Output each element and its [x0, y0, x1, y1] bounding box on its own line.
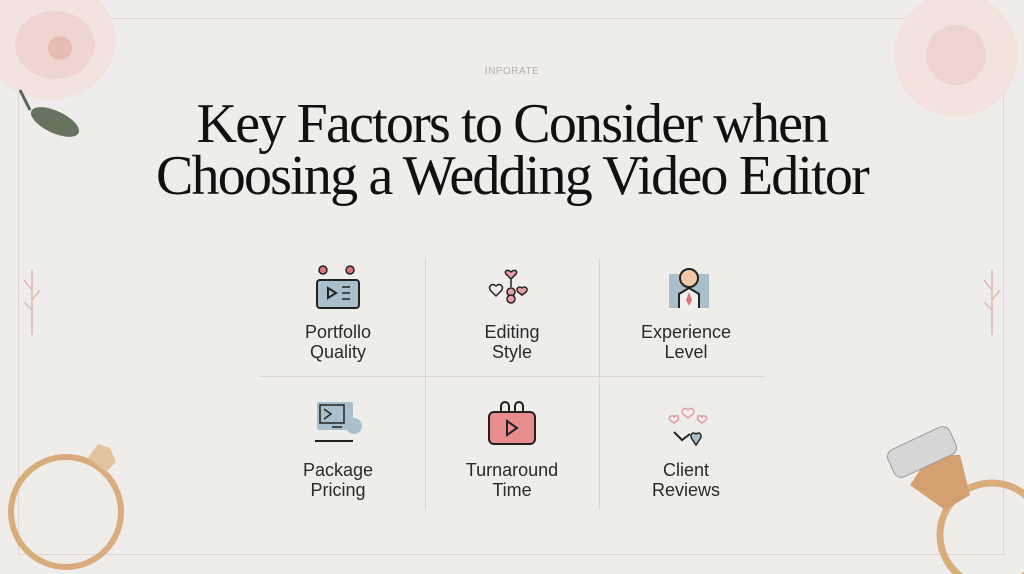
flower top right	[894, 0, 1018, 117]
icon: portfolio	[316, 265, 360, 309]
label: portfolio: Portfollo	[305, 322, 371, 342]
sprig right	[984, 270, 1000, 335]
label: package: Package	[303, 460, 373, 480]
label: experience	[641, 322, 731, 362]
label: portfolio	[305, 322, 371, 362]
subtitle: INPORATE	[485, 66, 539, 77]
icon: experience	[669, 268, 709, 308]
sprig left	[24, 270, 40, 335]
title: Choosing a Wedding Video Editor	[156, 145, 868, 207]
label: editing	[484, 322, 540, 362]
title: Key Factors to Consider when	[197, 93, 827, 155]
label: package: Pricing	[310, 480, 366, 500]
label: turnaround: Time	[492, 480, 532, 500]
ring left	[8, 444, 124, 570]
label: turnaround	[466, 460, 558, 500]
title	[156, 93, 870, 207]
flower top left	[0, 0, 116, 137]
label: package	[303, 460, 373, 500]
ring right	[887, 426, 1024, 574]
icon: editing style	[488, 270, 528, 304]
label: experience: Experience	[641, 322, 731, 342]
label: editing: Style	[492, 342, 532, 362]
label: reviews	[652, 460, 720, 500]
label: experience: Level	[664, 342, 708, 362]
label: reviews: Client	[663, 460, 709, 480]
label: turnaround: Turnaround	[466, 460, 558, 480]
label: reviews: Reviews	[652, 480, 720, 500]
label: portfolio: Quality	[310, 342, 366, 362]
icon: reviews	[668, 408, 708, 446]
icon: package	[315, 402, 362, 442]
label: editing: Editing	[484, 322, 540, 342]
icon: turnaround	[488, 401, 536, 445]
